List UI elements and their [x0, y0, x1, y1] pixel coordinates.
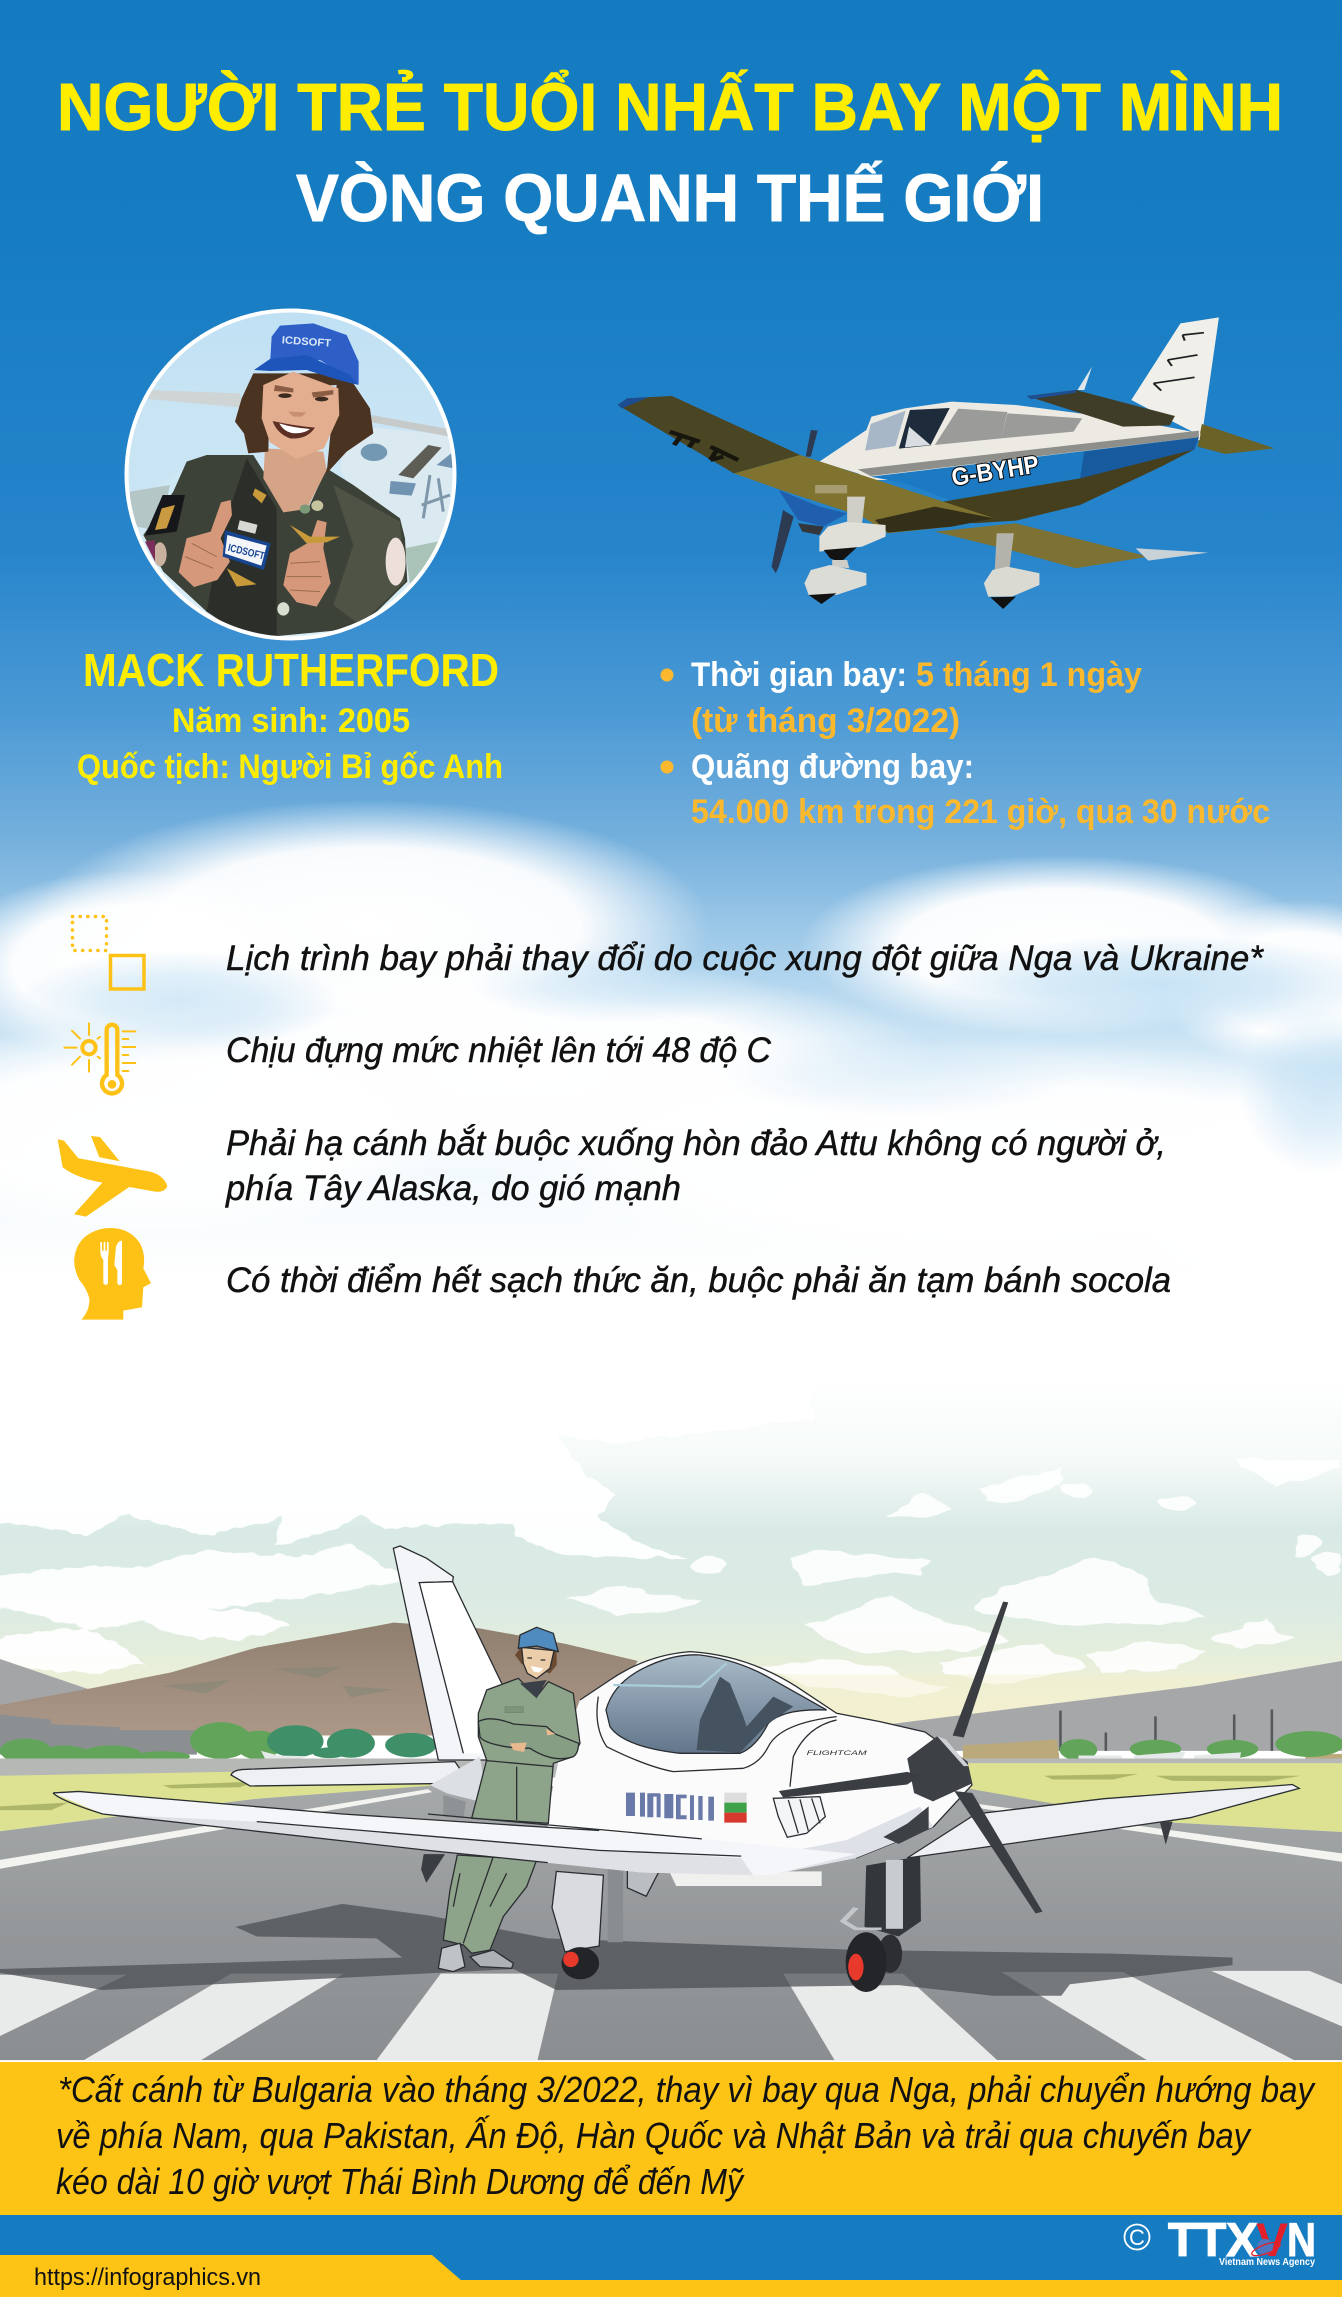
far-side wing	[907, 1785, 1299, 1858]
item 2 text: Chịu đựng mức nhiệt lên tới 48 độ C	[226, 1031, 772, 1070]
website tab	[0, 2255, 462, 2281]
background clouds	[0, 800, 1342, 1320]
website url: https://infographics.vn	[34, 2264, 261, 2291]
near wing inner	[734, 455, 995, 533]
icon: head with fork and knife	[74, 1228, 151, 1320]
horizon glow	[782, 1674, 1050, 1698]
threshold stripes	[0, 1971, 1342, 2060]
livery bars	[626, 1793, 714, 1821]
windows	[865, 411, 906, 451]
buildings	[0, 1714, 197, 1755]
agency caption: Vietnam News Agency	[1219, 2257, 1315, 2268]
near wing	[53, 1791, 856, 1875]
title line 2: VÒNG QUANH THẾ GIỚI	[296, 161, 1044, 236]
wing lettering	[670, 432, 738, 460]
item 1 text: Lịch trình bay phải thay đổi do cuộc xung đột giữa Nga và Ukraine*	[226, 939, 1264, 978]
tail cone	[430, 1756, 482, 1800]
antenna	[1077, 367, 1092, 390]
torso	[472, 1678, 580, 1823]
suit	[143, 455, 407, 638]
flight statistics: 54.000 km trong 221 giờ, qua 30 nước	[691, 793, 1270, 831]
illustration sky	[0, 1446, 1342, 1724]
shoes	[438, 1943, 465, 1972]
cockpit surround	[597, 1697, 837, 1787]
TTXVN logo: V	[1256, 2213, 1289, 2266]
portrait photo: Mack Rutherford: ICDSOFT	[227, 542, 266, 563]
grass	[0, 1768, 445, 1831]
main gear	[552, 1866, 659, 1979]
canopy	[606, 1655, 827, 1753]
copyright symbol	[1124, 2224, 1150, 2250]
hair	[235, 373, 373, 473]
plane registration text: G-BYHP	[950, 451, 1041, 492]
hands	[510, 1729, 555, 1752]
distance: Quãng đường bay:	[691, 748, 974, 786]
item 3 text: Phải hạ cánh bắt buộc xuống hòn đảo Attu không có người ở,	[226, 1124, 1166, 1163]
tail fin	[393, 1546, 502, 1760]
flight statistics: (từ tháng 3/2022)	[691, 702, 960, 740]
neck	[263, 448, 327, 512]
TTXVN logo	[1168, 2213, 1316, 2266]
near gear	[847, 497, 865, 523]
crossed arms	[478, 1719, 579, 1759]
illustration clouds	[569, 1460, 1342, 1697]
name: MACK RUTHERFORD	[83, 644, 499, 696]
ground strip	[0, 1759, 1342, 1778]
far stabilizer	[1198, 424, 1274, 454]
icon: dotted and solid squares	[72, 916, 144, 989]
tail fin	[1131, 317, 1219, 437]
portrait photo: Mack Rutherford	[120, 305, 460, 645]
footnote line 2: về phía Nam, qua Pakistan, Ấn Độ, Hàn Quốc và Nhật Bản và trải qua chuyến bay	[56, 2114, 1252, 2156]
fuselage shading	[780, 1806, 934, 1873]
nose	[779, 490, 847, 527]
title line 1: NGƯỜI TRẺ TUỔI NHẤT BAY MỘT MÌNH	[57, 70, 1283, 145]
waist line	[487, 1761, 553, 1820]
bullet	[660, 668, 674, 682]
cap	[270, 323, 359, 384]
TTXVN logo: N	[1287, 2213, 1316, 2266]
propeller	[772, 430, 818, 573]
flight time: Thời gian bay:	[691, 656, 907, 694]
propeller	[779, 1602, 1042, 1913]
bulgarian flag	[724, 1793, 747, 1823]
wing pods	[421, 1822, 1173, 1883]
thumbs up hands	[179, 500, 232, 587]
photo of flying plane G-BYHP	[618, 317, 1274, 609]
legs	[443, 1855, 537, 1953]
title	[57, 70, 1283, 236]
belly	[943, 449, 1195, 523]
horizontal stabilizer	[231, 1762, 465, 1786]
face	[262, 372, 339, 459]
poles	[1060, 1710, 1272, 1751]
white upper fuselage	[819, 402, 1201, 480]
patches and pins	[145, 495, 185, 536]
trees	[0, 1722, 1342, 1758]
far gear	[995, 533, 1014, 573]
icon: sun and thermometer	[64, 1023, 135, 1093]
nationality: Quốc tịch: Người Bỉ gốc Anh	[77, 748, 503, 786]
blue lower fuselage	[871, 437, 1199, 501]
name badge	[223, 530, 271, 570]
mountains	[0, 1659, 90, 1709]
footer	[0, 2213, 1342, 2297]
runway edge lines	[0, 1789, 1342, 1869]
collar	[520, 1680, 547, 1698]
TTXVN logo: TTX	[1168, 2213, 1258, 2266]
centre line	[669, 1871, 822, 1886]
plane shadow	[0, 1904, 1232, 1996]
runway	[0, 1785, 1342, 2060]
icon: airplane	[58, 1136, 167, 1217]
item 3 text	[225, 1124, 1166, 1208]
spinner	[907, 1736, 972, 1801]
cap	[518, 1627, 558, 1652]
flight statistics	[660, 656, 1270, 831]
airport illustration	[0, 1446, 1342, 2060]
near stabilizer	[1027, 390, 1175, 427]
background sky	[0, 0, 1342, 1400]
item 4 text: Có thời điểm hết sạch thức ăn, buộc phải ăn tạm bánh socola	[226, 1261, 1171, 1300]
near wing outer	[618, 396, 800, 473]
pilot	[438, 1627, 580, 1972]
upper white cloud mass	[0, 1446, 688, 1674]
footnote band	[0, 2062, 1342, 2215]
birth year: Năm sinh: 2005	[172, 702, 410, 740]
chest pocket	[505, 1707, 523, 1713]
marking text: FLIGHTCAM	[807, 1751, 867, 1757]
copyright symbol: C	[1129, 2225, 1145, 2250]
bullet	[660, 760, 674, 774]
item 3 text: phía Tây Alaska, do gió mạnh	[225, 1169, 681, 1208]
cowl vents	[773, 1797, 825, 1837]
cowl scoop	[883, 1806, 929, 1844]
flight statistics: 5 tháng 1 ngày	[916, 656, 1142, 694]
person name and details	[77, 644, 503, 786]
distant parked planes	[261, 1750, 1241, 1758]
leg creases	[453, 1857, 507, 1943]
nose gear	[843, 1856, 921, 1992]
portrait photo: Mack Rutherford: ICDSOFT	[281, 334, 332, 350]
fuselage	[547, 1652, 972, 1875]
far wing	[935, 523, 1148, 568]
hair	[515, 1648, 557, 1673]
footnote line 3: kéo dài 10 giờ vượt Thái Bình Dương để đến Mỹ	[56, 2161, 745, 2202]
face	[522, 1647, 554, 1679]
